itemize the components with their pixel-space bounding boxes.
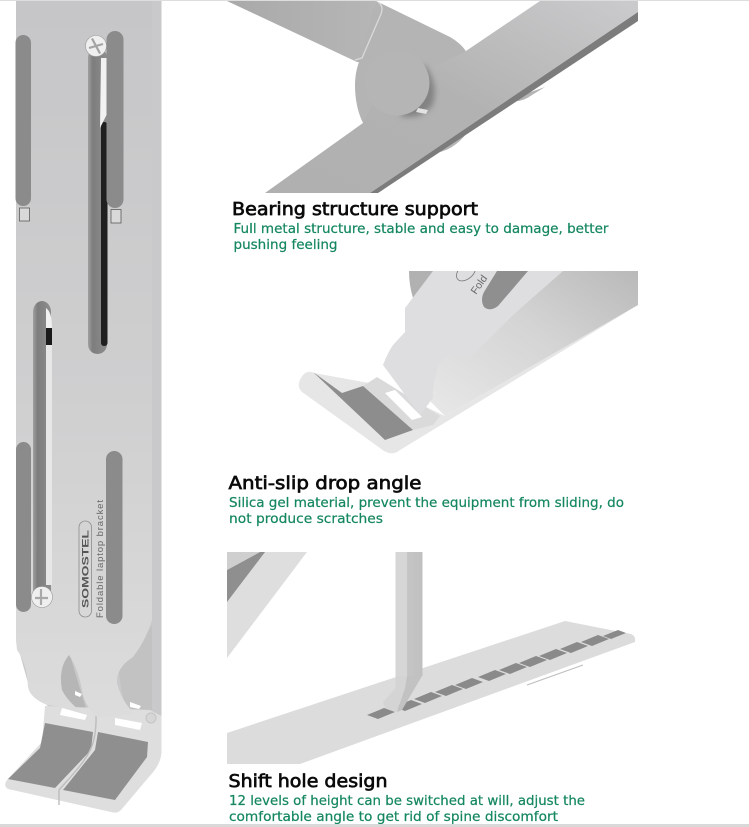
panel: anti-slip drop angle photo (299, 260, 638, 453)
brand logo badge: SOMOSTEL (80, 529, 90, 608)
text: bearing description (234, 222, 609, 253)
arm dark edge (370, 12, 638, 193)
bolt shadow (400, 64, 435, 117)
corner pad highlight (227, 552, 260, 570)
hinge bar (363, 377, 440, 430)
heading: bearing structure: Bearing structure support (232, 200, 478, 220)
text: anti-slip description: not produce scratches (229, 512, 383, 527)
notch shadow (56, 652, 88, 715)
base slot openings (60, 691, 142, 730)
top edge bar (0, 0, 749, 1)
product name text: Foldable laptop bracket (95, 500, 106, 618)
bottom screw (32, 586, 52, 608)
white slot opening (385, 390, 422, 420)
bottom edge bar (0, 824, 749, 827)
bracket base plate (5, 706, 161, 813)
upper long slot (88, 48, 107, 354)
right rubber pad (63, 732, 148, 800)
inner stand surface (431, 271, 638, 416)
black slot gap (101, 122, 108, 346)
height adjustment holes (367, 630, 626, 719)
lower slot white strip (46, 308, 52, 345)
text: anti-slip description (229, 496, 624, 527)
text: anti-slip description: Silica gel material, prevent the equipment from sliding, do (229, 496, 624, 511)
hinge collar (355, 1, 470, 123)
bracket corner shadow (148, 1, 152, 20)
support rod (394, 552, 422, 712)
collar highlight (355, 2, 382, 60)
bracket front plate (16, 1, 152, 717)
logo badge fragment (456, 271, 476, 282)
front plate (383, 271, 563, 415)
rubber pad (313, 372, 413, 440)
bolt glint (416, 108, 428, 114)
brand logo badge (79, 521, 92, 617)
upper left arm (227, 1, 376, 62)
text: bearing description: Full metal structure, stable and easy to damage, better (234, 222, 609, 237)
heading: anti-slip: Anti-slip drop angle (228, 474, 422, 494)
small square marks (20, 208, 121, 223)
rubber strip (482, 271, 528, 309)
base center seam (59, 712, 96, 805)
rubber strip: upper right (106, 31, 124, 208)
rubber strip: lower right (106, 451, 122, 624)
lower long slot (33, 301, 51, 600)
corner rubber pad (227, 552, 265, 602)
base plate (299, 305, 638, 453)
panel: shift hole photo (227, 552, 635, 764)
white slot strip (100, 58, 106, 128)
product text fragment: Fold (469, 273, 490, 297)
text: shift hole description: comfortable angle to get rid of spine discomfort (229, 810, 558, 825)
bearing bolt head (398, 64, 430, 116)
panel: bearing structure photo (227, 1, 638, 193)
text: bearing description: pushing feeling (234, 238, 338, 253)
right arm (265, 1, 638, 193)
text: shift hole description (229, 794, 585, 825)
text: shift hole description: 12 levels of height can be switched at will, adjust the (229, 794, 585, 809)
rubber strip: lower left (16, 442, 31, 612)
base bar (227, 621, 635, 764)
bracket side edge (16, 1, 162, 760)
hinge pin (146, 713, 156, 723)
rubber strip: upper left (16, 35, 31, 206)
rear stand disc (409, 271, 434, 298)
panel: full bracket product view (5, 1, 161, 813)
heading: shift hole: Shift hole design (228, 772, 388, 792)
top screw (86, 36, 106, 56)
corner bracket fragment (227, 552, 307, 658)
left rubber pad (8, 723, 93, 788)
right pocket shadow (117, 625, 152, 712)
underside washers (372, 87, 545, 193)
base bar shadow line (527, 665, 583, 685)
